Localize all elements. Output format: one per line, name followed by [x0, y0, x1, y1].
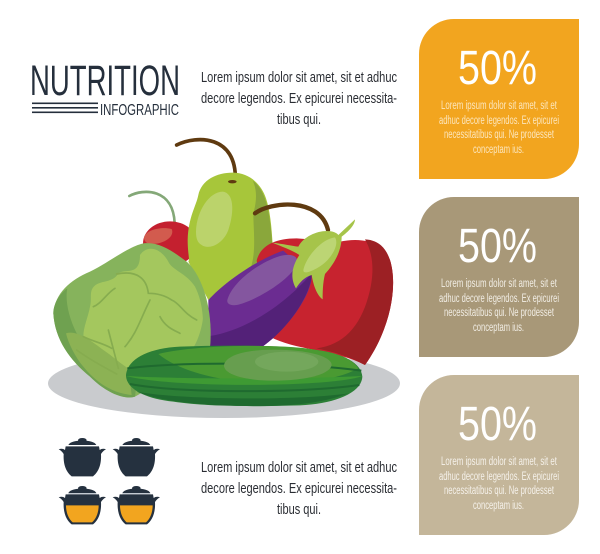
top text block: [201, 69, 397, 128]
illustration: vegetables on a plate: [48, 140, 400, 418]
panel: orange stat card: 50%: [458, 42, 537, 95]
icon: pear: [177, 140, 273, 300]
icon: empty pot: [113, 438, 160, 476]
icon: red apple: [255, 204, 393, 365]
icon: eggplant: [208, 219, 355, 346]
icon: cherry: [129, 192, 197, 265]
title: Nutrition Infographic: INFOGRAPHIC: [100, 102, 179, 119]
panel: orange stat card: conceptam ius.: [473, 144, 524, 156]
panel: orange stat card: [419, 19, 579, 179]
icon: filled pot: [113, 486, 160, 524]
icon: cucumber: [126, 346, 362, 406]
bottom text block: [201, 459, 397, 518]
icon: empty pot: [59, 438, 106, 476]
title: Nutrition Infographic: NUTRITION: [30, 57, 180, 105]
panel: tan stat card: [419, 375, 579, 535]
panel: brown stat card: conceptam ius.: [473, 322, 524, 334]
panel: tan stat card: 50%: [458, 398, 537, 451]
top text block: Lorem ipsum dolor sit amet, sit et adhuc: [201, 69, 397, 86]
panel: tan stat card: conceptam ius.: [473, 500, 524, 512]
top text block: decore legendos. Ex epicurei necessita-: [201, 90, 397, 107]
bottom text block: Lorem ipsum dolor sit amet, sit et adhuc: [201, 459, 397, 476]
bottom text block: decore legendos. Ex epicurei necessita-: [201, 480, 397, 497]
panel: brown stat card: [419, 197, 579, 357]
title: Nutrition Infographic: [30, 57, 180, 119]
icon: filled pot: [59, 486, 106, 524]
plate: [48, 349, 400, 418]
panel: brown stat card: 50%: [458, 220, 537, 273]
top text block: tibus qui.: [277, 111, 321, 128]
bottom text block: tibus qui.: [277, 501, 321, 518]
eggplant calyx: [272, 219, 355, 299]
icon: lettuce: [53, 243, 211, 397]
